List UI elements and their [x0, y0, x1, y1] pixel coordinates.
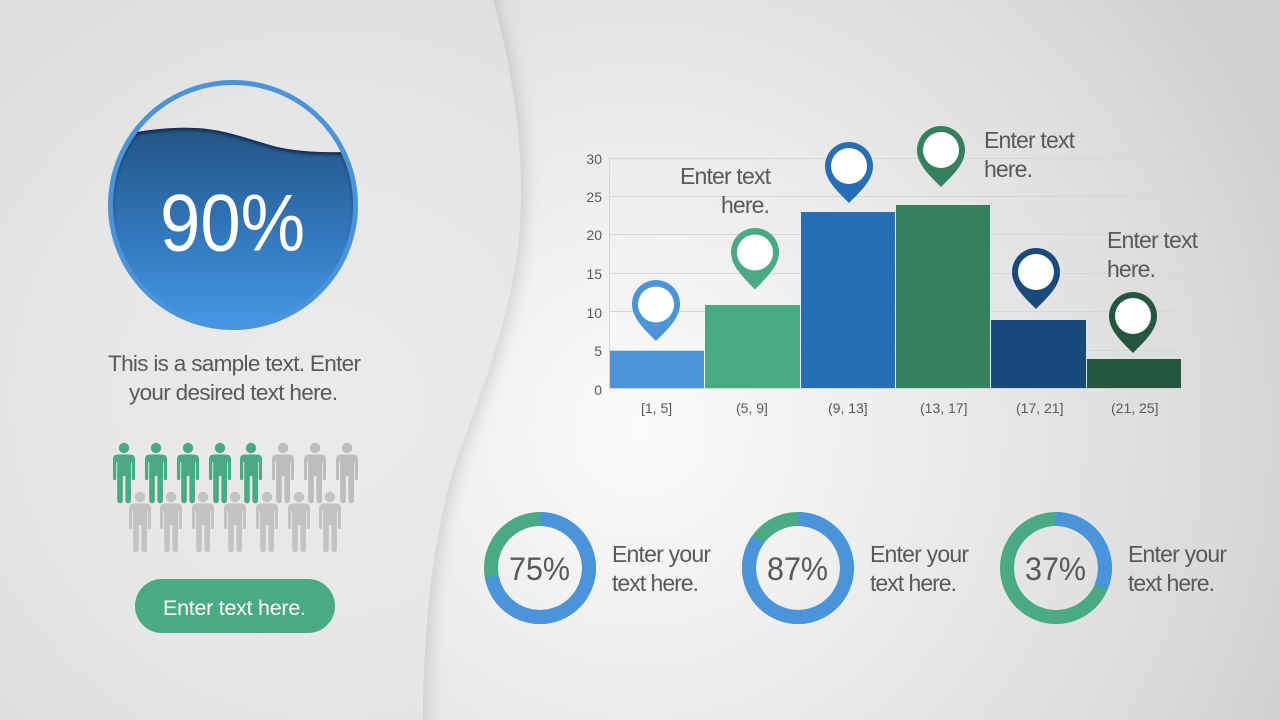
people pictogram: 5 of 15 highlighted	[113, 443, 358, 552]
donut 37 percent: 37%	[1025, 551, 1086, 587]
donut 87 percent	[749, 519, 847, 617]
y axis labels: 25	[586, 189, 602, 205]
donut 87 percent: 87%	[767, 551, 828, 587]
chart callout: tallest bar: here.	[984, 156, 1033, 182]
y axis labels: 5	[594, 343, 602, 359]
donut 37 caption	[1128, 541, 1227, 596]
grid lines	[609, 158, 1181, 388]
donut 87 caption: text here.	[870, 570, 957, 596]
chart callout: green bar	[680, 163, 772, 218]
x axis labels: (13, 17]	[920, 400, 967, 416]
chart callout: last bar: Enter text	[1107, 227, 1199, 253]
x axis labels: (5, 9]	[736, 400, 768, 416]
y axis labels: 15	[586, 266, 602, 282]
sample text block: This is a sample text. Enter	[108, 351, 362, 376]
chart callout: tallest bar: Enter text	[984, 127, 1076, 153]
button	[135, 579, 335, 633]
donut 37 caption: Enter your	[1128, 541, 1227, 567]
gauge value: 90%	[160, 178, 305, 268]
chart callout: last bar	[1107, 227, 1199, 282]
map pin 4	[917, 126, 965, 187]
donut 75 caption	[612, 541, 711, 596]
y axis labels: 10	[586, 305, 602, 321]
bars	[610, 205, 1181, 388]
y axis labels: 20	[586, 227, 602, 243]
button: Enter text here.	[163, 596, 306, 620]
sample text block	[108, 351, 362, 405]
gauge: 90 percent water circle	[108, 80, 358, 330]
donut 37 caption: text here.	[1128, 570, 1215, 596]
donut 37 percent	[1007, 519, 1105, 617]
chart callout: last bar: here.	[1107, 256, 1156, 282]
donut 75 percent	[491, 519, 589, 617]
chart callout: tallest bar	[984, 127, 1076, 182]
chart callout: green bar: Enter text	[680, 163, 772, 189]
x axis labels: [1, 5]	[641, 400, 672, 416]
x axis labels: (21, 25]	[1111, 400, 1158, 416]
map pin 1	[632, 280, 680, 341]
map pin 2	[731, 228, 779, 290]
y axis labels	[586, 151, 602, 398]
y axis labels: 30	[586, 151, 602, 167]
map pin 6	[1109, 292, 1157, 353]
donut 87 caption	[870, 541, 969, 596]
donut 75 percent: 75%	[509, 551, 570, 587]
panel shadow	[4, 0, 525, 720]
map pin 3	[825, 142, 873, 203]
x axis labels: (17, 21]	[1016, 400, 1063, 416]
histogram chart	[586, 151, 1181, 416]
donut 75 caption: Enter your	[612, 541, 711, 567]
sample text block: your desired text here.	[129, 380, 338, 405]
x axis labels: (9, 13]	[828, 400, 868, 416]
map pin 5	[1012, 248, 1060, 309]
chart callout: green bar: here.	[721, 192, 770, 218]
donut 87 caption: Enter your	[870, 541, 969, 567]
x axis labels	[641, 400, 1158, 416]
y axis labels: 0	[594, 382, 602, 398]
donut 75 caption: text here.	[612, 570, 699, 596]
left curved panel	[0, 0, 521, 720]
